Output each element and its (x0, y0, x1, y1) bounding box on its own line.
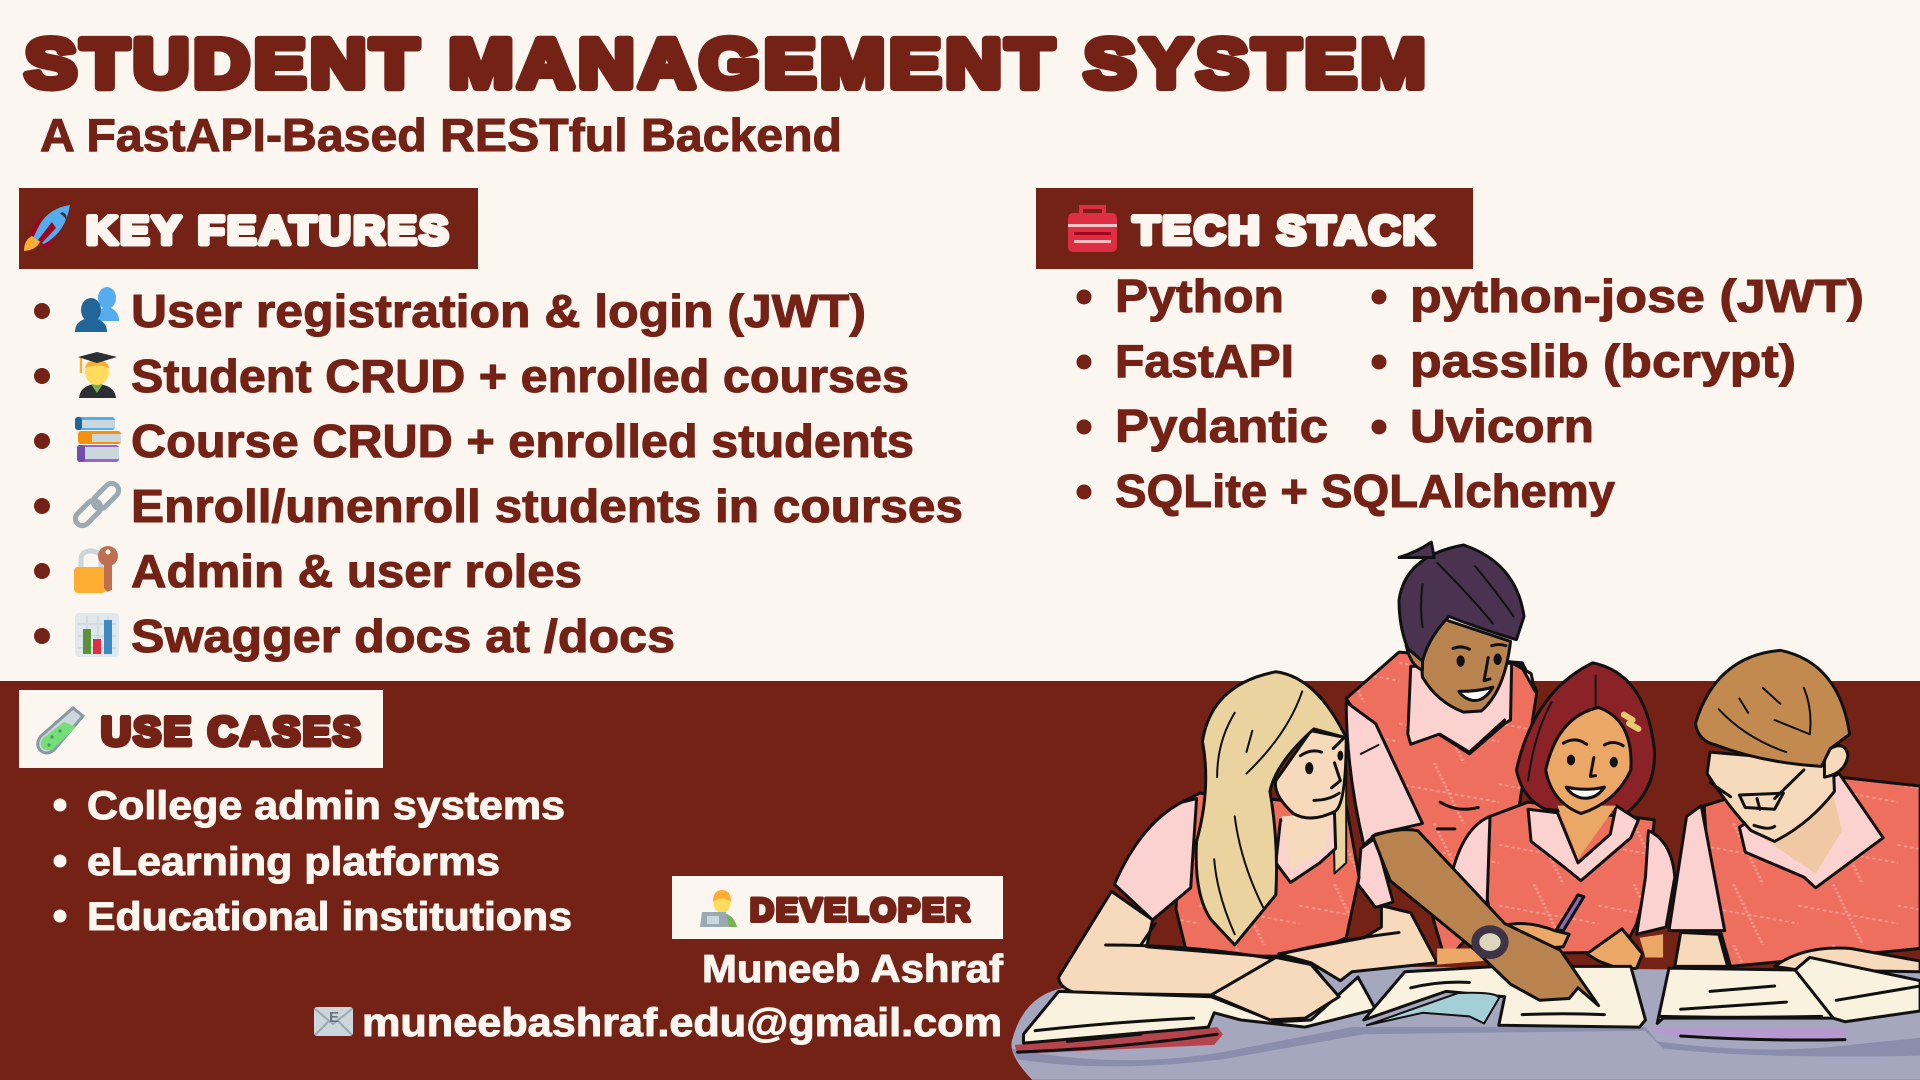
figure: boy with glasses (1669, 650, 1920, 972)
icon: bar chart (75, 613, 119, 657)
icon: rocket (24, 205, 70, 251)
tech list: python-jose (JWT) (1410, 270, 1864, 322)
panel: tech stack (1036, 188, 1864, 517)
icon: books (75, 417, 121, 462)
books and pointing arm (1015, 830, 1920, 1054)
icon: graduate (78, 352, 117, 398)
icon: users (75, 287, 119, 332)
list item: admin: Admin & user roles (131, 545, 582, 597)
heading: developer (672, 876, 1003, 939)
panel: developer (314, 876, 1004, 1045)
list item: swagger: Swagger docs at /docs (131, 610, 675, 662)
illustration: students studying (1011, 542, 1920, 1080)
icon: toolbox (1068, 207, 1117, 252)
developer email: muneebashraf.edu@gmail.com (362, 1001, 1002, 1045)
tech list (1076, 270, 1864, 517)
title: STUDENT MANAGEMENT SYSTEM (25, 25, 1430, 102)
use case list: College admin systems (87, 784, 565, 828)
heading: tech stack: TECH STACK (1133, 209, 1437, 253)
icon: lock and key (74, 546, 118, 593)
figure: standing boy (1346, 542, 1537, 963)
list item: student crud: Student CRUD + enrolled courses (131, 350, 909, 402)
subtitle: A FastAPI-Based RESTful Backend (40, 109, 842, 161)
tech list: FastAPI (1115, 335, 1294, 387)
tech list: Python (1115, 270, 1284, 322)
tech list: Uvicorn (1410, 400, 1594, 452)
icon: technologist (700, 890, 737, 927)
icon: envelope (314, 1007, 353, 1036)
heading: use cases: USE CASES (101, 710, 363, 754)
heading: developer: DEVELOPER (750, 892, 972, 928)
heading: tech stack (1036, 188, 1473, 269)
heading: key features (19, 188, 478, 269)
icon: test tube (38, 708, 83, 753)
list item: user registration: User registration & login (JWT) (131, 285, 866, 337)
tech list: SQLite + SQLAlchemy (1115, 465, 1615, 517)
heading: use cases (19, 690, 383, 768)
list item: enroll: Enroll/unenroll students in courses (131, 480, 963, 532)
icon: link (72, 480, 122, 529)
panel: use cases (19, 690, 572, 939)
table (1011, 966, 1920, 1080)
use case list: eLearning platforms (87, 840, 500, 884)
figure: blonde girl (1059, 672, 1437, 1020)
use case list: Educational institutions (87, 895, 572, 939)
icon: envelope: E (329, 1009, 339, 1026)
list item: course crud: Course CRUD + enrolled students (131, 415, 914, 467)
panel: key features (19, 188, 963, 662)
developer name: Muneeb Ashraf (702, 948, 1004, 991)
use case list (54, 784, 572, 939)
figure: red-haired girl (1437, 663, 1675, 970)
tech list: Pydantic (1115, 400, 1328, 452)
tech list: passlib (bcrypt) (1410, 335, 1796, 387)
heading: key features: KEY FEATURES (86, 209, 451, 253)
